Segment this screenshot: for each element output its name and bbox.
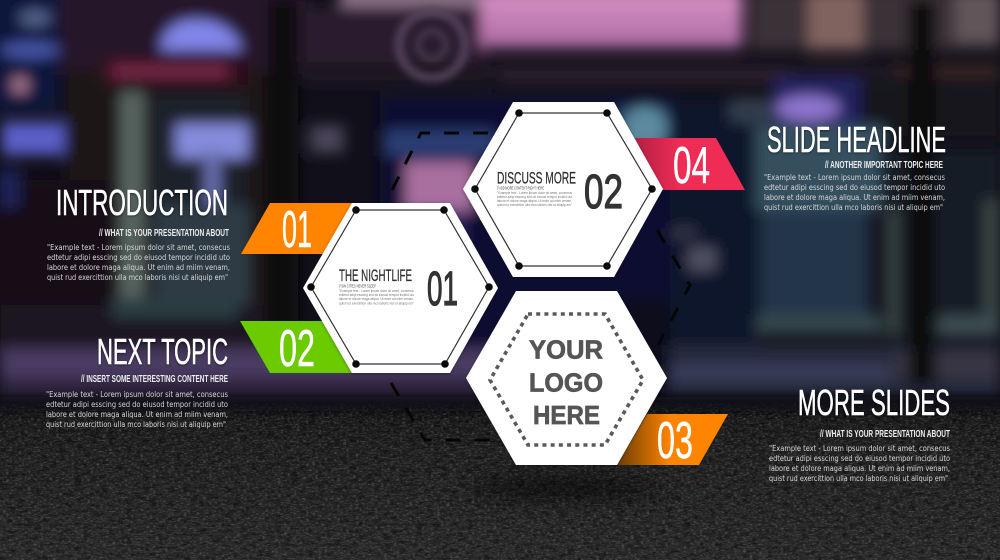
text block: more slides <box>769 382 950 483</box>
text block: next topic: NEXT TOPIC <box>97 331 228 372</box>
ribbon 01 <box>241 201 353 259</box>
background: asphalt ground <box>0 397 1000 560</box>
logo text: LOGO <box>529 368 603 398</box>
text block: introduction: quist rud exercittion ulla mco laboris nisi ut aliquip em" <box>47 273 228 282</box>
ribbon 03: 03 <box>657 412 693 470</box>
hexagon 02 text <box>497 170 576 207</box>
hexagon 01 text: THE NIGHTLIFE <box>339 267 412 285</box>
logo text <box>529 334 603 430</box>
ribbon 03 <box>617 412 728 470</box>
ribbon 04: 04 <box>673 137 710 195</box>
hexagon 02 text: labore et dolore maga aliqua. Ut enim ad miim venam, <box>497 199 572 203</box>
ribbon 02: 02 <box>279 320 315 378</box>
text block: next topic: edtetur adipi esscing sed do eiusod tempor incidid uto <box>46 400 228 409</box>
text block: slide headline: labore et dolore maga aliqua. Ut enim ad miim venam, <box>764 193 945 202</box>
ribbon 04 <box>635 137 745 195</box>
ribbon 02 <box>240 320 353 378</box>
hexagon 01 number: 01 <box>427 263 458 316</box>
hexagon 02 text: "Example text - Lorem ipsum dolor sit amet, consecus <box>497 191 572 195</box>
text block: introduction <box>47 182 230 282</box>
hexagon 01 text: edtetur adipi esscing sed do eiusod tempor incidid uto <box>339 293 414 297</box>
hexagon 02 text: // ADD MORE CONTENT RIGHT HERE <box>497 186 544 190</box>
text block: slide headline <box>764 119 946 212</box>
text block: slide headline: edtetur adipi esscing sed do eiusod tempor incidid uto <box>764 183 945 192</box>
text block: next topic: quist rud exercittion ulla mco laboris nisi ut aliquip em" <box>46 420 226 429</box>
hexagon 02: discuss more <box>463 102 663 277</box>
inner hexagon outline with dots <box>307 206 493 368</box>
car wheel <box>399 12 465 78</box>
text block: introduction: // WHAT IS YOUR PRESENTATION ABOUT <box>99 227 229 239</box>
hexagon 03: logo placeholder <box>466 291 667 465</box>
text block: more slides: labore et dolore maga aliqua. Ut enim ad miim venam, <box>769 464 950 473</box>
hexagon 02 text: edtetur adipi esscing sed do eiusod tempor incidid uto <box>497 195 572 199</box>
inner hexagon outline with dots <box>471 109 656 270</box>
text block: next topic: labore et dolore maga aliqua. Ut enim ad miim venam, <box>46 410 228 419</box>
text block: more slides: edtetur adipi esscing sed do eiusod tempor incidid uto <box>769 454 950 463</box>
hexagon 01 text: labore et dolore maga aliqua. Ut enim ad miim venam, <box>339 297 414 301</box>
text block: introduction: edtetur adipi esscing sed do eiusod tempor incidid uto <box>47 253 230 262</box>
hexagon 01 text: quist rud exercittion ulla mco laboris nisi ut aliquip em" <box>339 302 415 306</box>
dashed connector lines <box>391 133 690 440</box>
text block: more slides: quist rud exercittion ulla mco laboris nisi ut aliquip em" <box>769 474 948 483</box>
hexagon 02 text: quist rud exercittion ulla mco laboris nisi ut aliquip em" <box>497 203 573 207</box>
text block: introduction: labore et dolore maga aliqua. Ut enim ad miim venam, <box>47 263 230 272</box>
hexagon 01 text: // SIN CITIES NEVER SLEEP <box>339 284 376 288</box>
ribbon 01: 01 <box>282 201 312 259</box>
dotted inner hexagon <box>490 314 643 445</box>
text block: more slides: "Example text - Lorem ipsum dolor sit amet, consecus <box>769 444 950 453</box>
text block: next topic <box>46 331 228 429</box>
logo text: YOUR <box>529 334 603 364</box>
hexagon 01: the nightlife <box>303 203 498 373</box>
logo text: HERE <box>533 400 600 430</box>
text block: slide headline: "Example text - Lorem ipsum dolor sit amet, consecus <box>764 173 945 182</box>
floor shadow under logo hexagon <box>470 479 660 497</box>
text block: introduction: INTRODUCTION <box>56 182 228 223</box>
text block: introduction: "Example text - Lorem ipsum dolor sit amet, consecus <box>47 243 230 252</box>
text block: next topic: "Example text - Lorem ipsum dolor sit amet, consecus <box>46 390 228 399</box>
text block: next topic: // INSERT SOME INTERESTING CONTENT HERE <box>81 373 228 385</box>
hexagon 01 text <box>339 267 415 306</box>
text block: slide headline: quist rud exercittion ulla mco laboris nisi ut aliquip em" <box>764 203 943 212</box>
hexagon 02 text: DISCUSS MORE <box>497 170 576 188</box>
hexagon 02 number: 02 <box>584 166 623 219</box>
hexagon 01 text: "Example text - Lorem ipsum dolor sit amet, consecus <box>339 289 414 293</box>
